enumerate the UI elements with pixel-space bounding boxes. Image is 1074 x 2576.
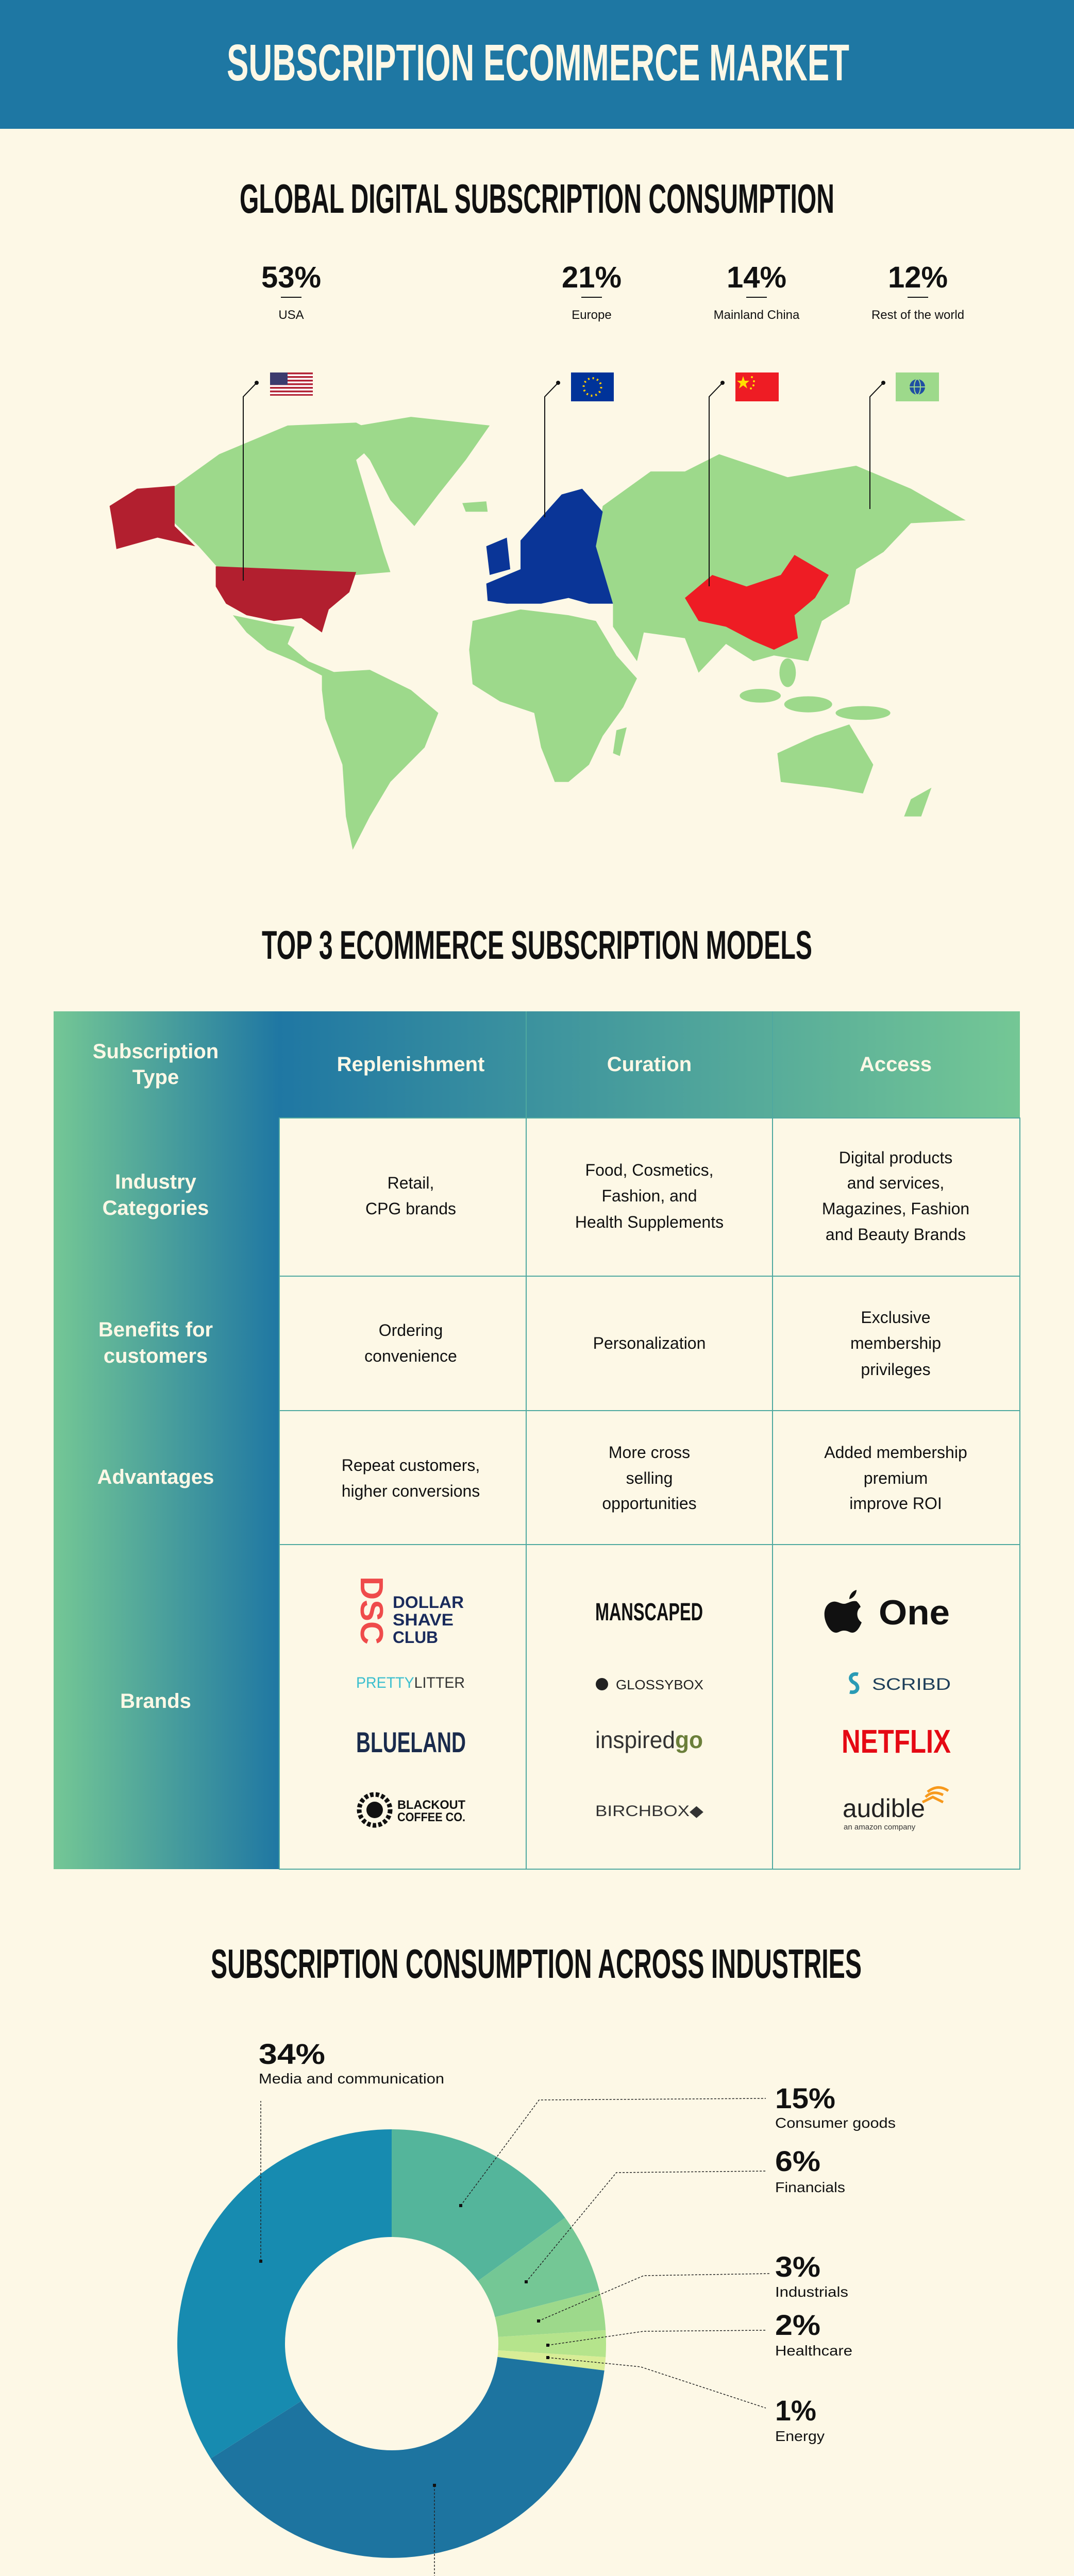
table cell text: and services,	[847, 1174, 944, 1192]
table row labels	[93, 1040, 219, 1713]
label: consumer goods	[775, 2082, 896, 2131]
table column headers: Replenishment	[337, 1053, 484, 1076]
stat: Europe	[562, 261, 622, 322]
flag: USA	[270, 372, 313, 396]
stat: Europe: 21%	[562, 261, 622, 294]
brand logos: curation: BIRCHBOX◆	[595, 1803, 703, 1820]
stat: China	[714, 261, 800, 322]
table cell text: and Beauty Brands	[826, 1225, 966, 1244]
table cell text: privileges	[861, 1360, 931, 1379]
label: financials	[775, 2145, 845, 2195]
brand logos: replenishment: DSC	[354, 1577, 389, 1645]
table row labels: Brands	[120, 1690, 191, 1713]
flag: rest of world	[896, 372, 939, 401]
table row labels: Advantages	[97, 1466, 214, 1488]
label: energy: Energy	[775, 2428, 825, 2444]
label: consumer goods: Consumer goods	[775, 2115, 896, 2131]
table cell text: convenience	[364, 1347, 457, 1365]
label: industrials	[775, 2250, 848, 2300]
table cell text: CPG brands	[365, 1199, 456, 1218]
brand logos: curation	[595, 1599, 703, 1820]
brand logos: curation: GLOSSYBOX	[616, 1677, 703, 1692]
table cell text: higher conversions	[342, 1482, 480, 1500]
table row labels: Industry	[115, 1171, 197, 1193]
table cell text: improve ROI	[849, 1494, 942, 1513]
label: energy: 1%	[775, 2394, 816, 2427]
table cell text: Magazines, Fashion	[822, 1199, 969, 1218]
stat: USA	[261, 261, 321, 322]
table cell text: More cross	[609, 1443, 690, 1462]
brand logos: replenishment: CLUB	[393, 1628, 438, 1647]
stat: China: 14%	[727, 261, 786, 294]
label: financials: Financials	[775, 2179, 845, 2195]
brand logos: curation: MANSCAPED	[595, 1599, 703, 1626]
label: healthcare	[775, 2309, 852, 2359]
table row labels: customers	[104, 1345, 208, 1367]
header banner	[0, 0, 1074, 129]
brand logos: replenishment: BLACKOUT	[397, 1798, 465, 1812]
label: energy	[775, 2394, 825, 2444]
table cell text: Digital products	[839, 1148, 952, 1167]
table cell text: premium	[864, 1469, 928, 1487]
stat: China: Mainland China	[714, 308, 800, 322]
label: media	[259, 2038, 444, 2087]
table column headers: Curation	[607, 1053, 692, 1076]
brand logos: access: an amazon company	[844, 1823, 916, 1832]
table cell text: Food, Cosmetics,	[585, 1161, 713, 1179]
donut labels	[259, 2038, 896, 2576]
stat: rest of world	[871, 261, 964, 322]
brand logos: curation: inspiredgo	[595, 1726, 703, 1753]
brand logos: access: SCRIBD	[872, 1675, 951, 1693]
table cell text: Added membership	[824, 1443, 967, 1462]
table cell text: membership	[850, 1334, 941, 1352]
table row labels: Subscription	[93, 1040, 219, 1063]
brand logos: replenishment: BLUELAND	[356, 1726, 466, 1758]
stat: USA: USA	[278, 308, 304, 322]
label: consumer goods: 15%	[775, 2082, 835, 2114]
brand logos: replenishment: SHAVE	[393, 1611, 454, 1629]
label: industrials: Industrials	[775, 2284, 848, 2300]
brand logos: replenishment	[354, 1577, 466, 1825]
stat: USA: 53%	[261, 261, 321, 294]
stat: rest of world: 12%	[888, 261, 948, 294]
brand logos: replenishment: COFFEE CO.	[397, 1810, 465, 1824]
table: subscription models	[54, 1011, 1020, 1869]
donut chart	[177, 2129, 606, 2558]
label: healthcare: Healthcare	[775, 2343, 852, 2359]
label: media: 34%	[259, 2038, 325, 2070]
table cell text: Health Supplements	[575, 1213, 724, 1231]
table cell text: Exclusive	[861, 1308, 931, 1327]
label: industrials: 3%	[775, 2250, 820, 2283]
table cell text: Repeat customers,	[342, 1456, 480, 1475]
brand logos: replenishment: PRETTYLITTER	[356, 1674, 465, 1691]
table cell text: Retail,	[388, 1174, 434, 1192]
table row labels: Benefits for	[98, 1318, 213, 1341]
label: media: Media and communication	[259, 2071, 444, 2087]
brand logos: access: NETFLIX	[842, 1723, 951, 1760]
flag: China	[735, 372, 779, 401]
label: financials: 6%	[775, 2145, 820, 2177]
table cell text: Personalization	[593, 1334, 706, 1352]
flag: EU	[571, 372, 614, 401]
table cell text: opportunities	[602, 1494, 697, 1513]
table column headers	[337, 1053, 932, 1076]
table cell text: Ordering	[379, 1321, 443, 1340]
leader lines for map	[243, 383, 883, 586]
brand logos: replenishment: DOLLAR	[393, 1593, 464, 1612]
brand logos: access: One	[879, 1593, 950, 1632]
brand logos: access: audible	[843, 1794, 925, 1823]
stats: regional percentages	[261, 261, 964, 322]
stat: rest of world: Rest of the world	[871, 308, 964, 322]
world map	[110, 417, 966, 850]
label: healthcare: 2%	[775, 2309, 820, 2341]
table row labels: Categories	[103, 1197, 209, 1219]
table cell text: Fashion, and	[601, 1187, 697, 1205]
donut leader lines	[261, 2098, 770, 2576]
brand logos: access	[825, 1590, 951, 1832]
table row labels: Type	[132, 1066, 179, 1089]
table column headers: Access	[860, 1053, 932, 1076]
table cell text	[342, 1148, 969, 1513]
stat: Europe: Europe	[572, 308, 612, 322]
table cell text: selling	[626, 1469, 673, 1487]
